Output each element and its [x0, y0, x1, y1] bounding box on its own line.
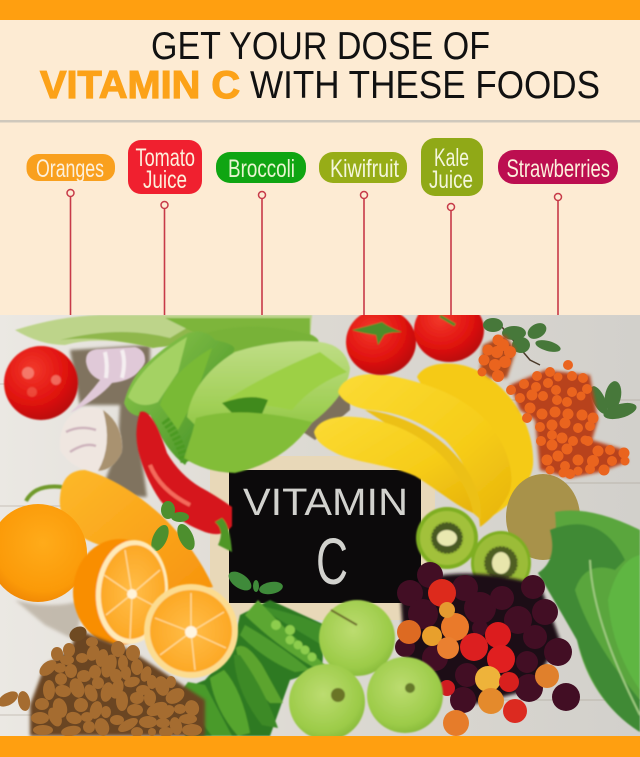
label: Kiwifruit: Kiwifruit	[330, 155, 399, 183]
right romaine lettuce	[538, 510, 640, 732]
almonds	[0, 623, 205, 738]
label: Tomato Juice	[128, 140, 202, 315]
food labels	[26, 138, 618, 315]
title: VITAMIN C	[40, 64, 240, 107]
label: Tomato Juice: Juice	[143, 166, 187, 194]
top orange bar	[0, 0, 640, 20]
label: Kale Juice	[421, 138, 483, 315]
photo: vitamin C foods	[0, 298, 640, 740]
label: Broccoli	[216, 152, 306, 315]
brown kiwi	[506, 474, 580, 560]
tomato left	[4, 346, 78, 420]
orange half 1	[73, 537, 172, 647]
title	[40, 25, 600, 107]
title: GET YOUR DOSE OF	[151, 25, 490, 68]
pale lettuce top-left	[15, 315, 312, 348]
rowan leaves	[483, 318, 638, 422]
label: Oranges: Oranges	[36, 155, 104, 183]
yellow pepper	[26, 470, 213, 600]
right tomatoes	[345, 315, 485, 376]
red chili pepper	[136, 412, 232, 552]
kiwi slices	[415, 506, 532, 583]
green apples	[289, 600, 443, 740]
label: Kiwifruit	[319, 152, 407, 315]
label: Kale Juice: Juice	[429, 166, 473, 194]
label: Strawberries	[498, 150, 618, 315]
label: Oranges	[26, 154, 115, 315]
wooden table	[0, 315, 640, 736]
chalk word: VITAMIN	[243, 482, 408, 524]
orange half 2	[144, 584, 238, 678]
label: Tomato Juice: Tomato	[136, 144, 195, 172]
label: Broccoli: Broccoli	[228, 155, 295, 183]
label: Kale Juice: Kale	[434, 144, 469, 172]
bananas	[314, 364, 533, 527]
pea pods	[180, 600, 325, 736]
cherries	[395, 562, 580, 736]
basil sprig	[228, 572, 283, 594]
mint leaves on pepper	[151, 501, 195, 551]
chalk letter C: C	[316, 524, 348, 598]
bottom orange bar	[0, 736, 640, 757]
vitamin C chalkboard	[210, 456, 435, 620]
garlic	[60, 347, 145, 472]
central lettuce	[124, 326, 350, 473]
rowan berries	[478, 334, 630, 479]
whole orange	[0, 504, 87, 602]
title: WITH THESE FOODS	[250, 64, 600, 107]
